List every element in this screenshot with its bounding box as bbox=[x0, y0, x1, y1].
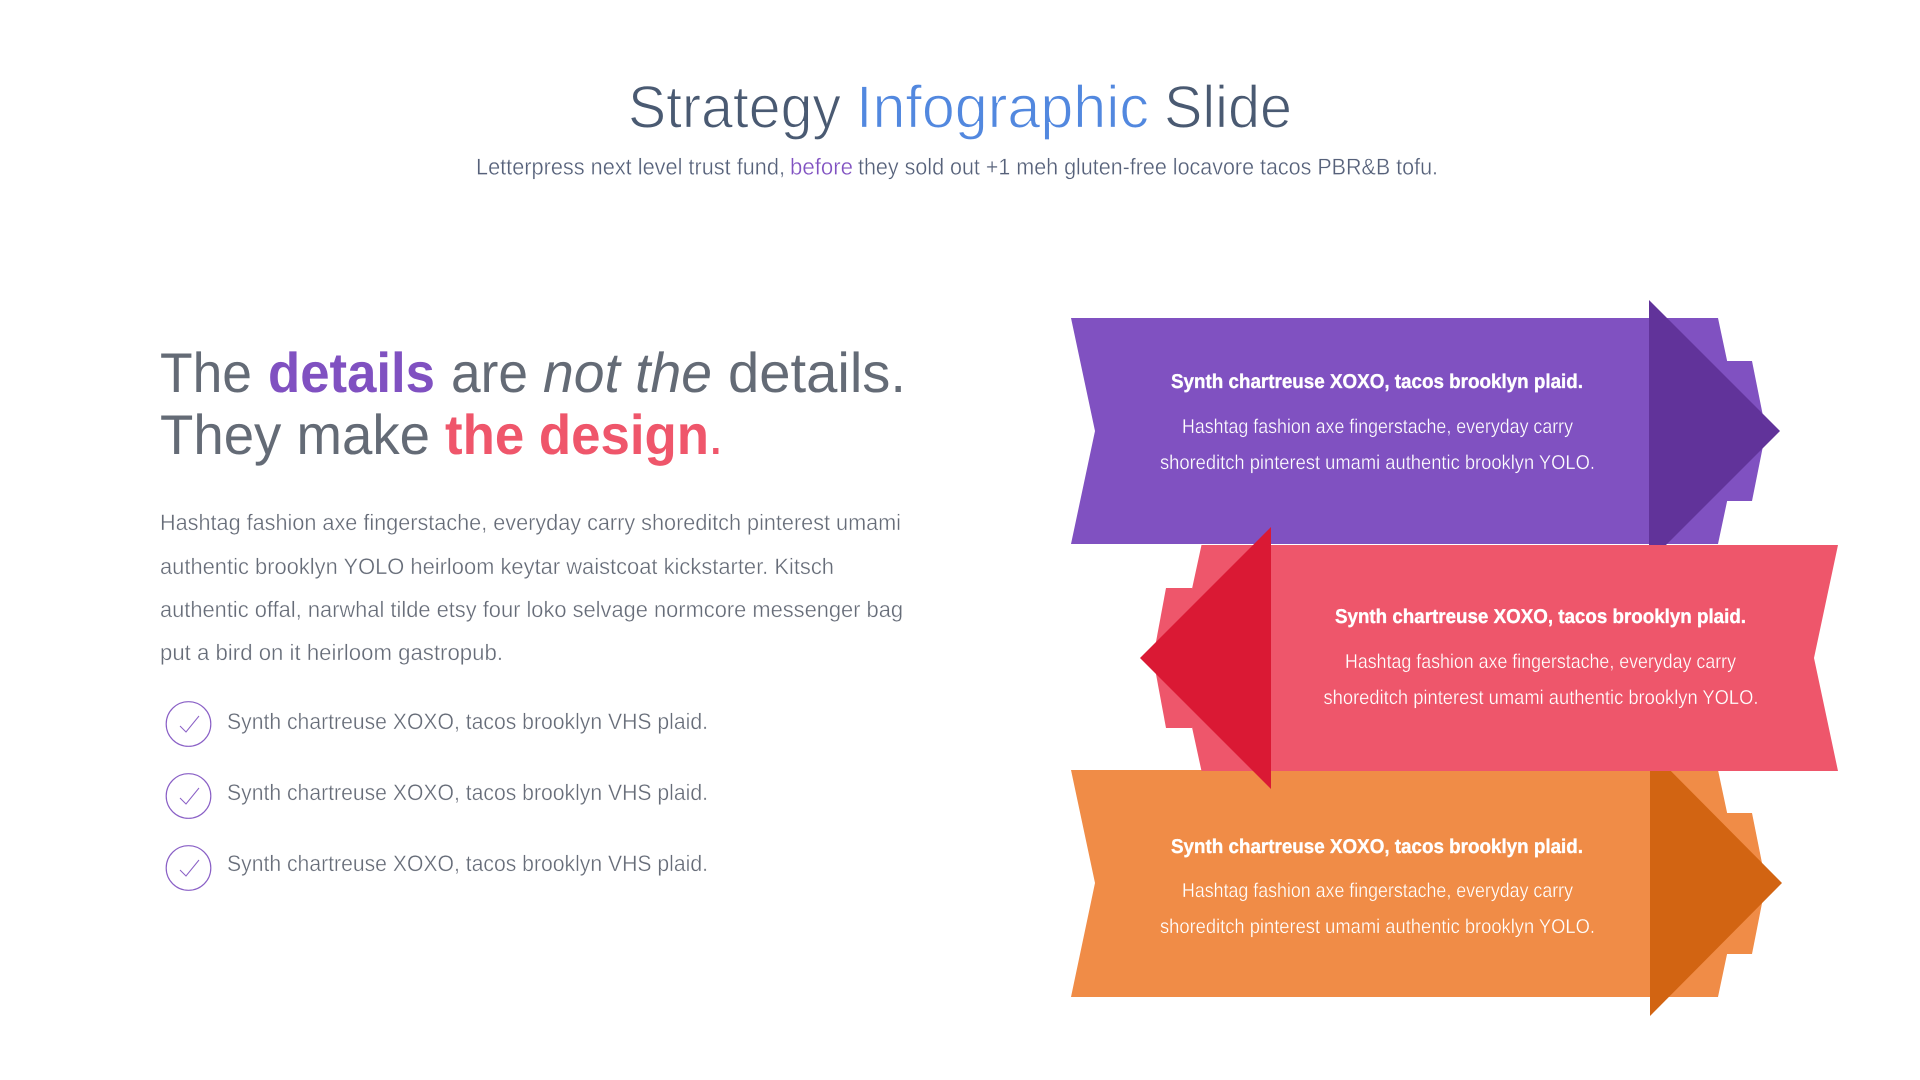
arrow: purple bbox=[1649, 300, 1780, 562]
purple text: shoreditch pinterest umami authentic brooklyn YOLO. bbox=[1160, 452, 1595, 474]
orange heading: Synth chartreuse XOXO, tacos brooklyn plaid. bbox=[1171, 836, 1583, 858]
heading: The bbox=[160, 341, 252, 404]
checklist bbox=[166, 702, 708, 890]
checklist item 3: Synth chartreuse XOXO, tacos brooklyn VHS plaid. bbox=[227, 851, 708, 876]
purple text: Hashtag fashion axe fingerstache, everyday carry bbox=[1182, 416, 1573, 438]
panel: pink arrow banner bbox=[1140, 527, 1838, 789]
checklist item 1: Synth chartreuse XOXO, tacos brooklyn VHS plaid. bbox=[227, 709, 708, 734]
title bbox=[628, 74, 1292, 140]
heading: details bbox=[268, 341, 435, 404]
title: Strategy bbox=[628, 74, 841, 140]
purple text bbox=[1160, 416, 1595, 474]
arrow: orange bbox=[1650, 750, 1782, 1016]
pink text bbox=[1324, 651, 1758, 709]
body paragraph: authentic offal, narwhal tilde etsy four loko selvage normcore messenger bag bbox=[160, 597, 903, 622]
pink text: shoreditch pinterest umami authentic brooklyn YOLO. bbox=[1324, 687, 1758, 709]
panel: orange arrow banner bbox=[1071, 750, 1782, 1016]
heading: are bbox=[451, 341, 528, 404]
subtitle: Letterpress next level trust fund, bbox=[476, 154, 785, 180]
orange text: Hashtag fashion axe fingerstache, everyday carry bbox=[1182, 880, 1573, 902]
subtitle: they sold out +1 meh gluten-free locavore tacos PBR&B tofu. bbox=[858, 154, 1438, 180]
orange text bbox=[1160, 880, 1595, 938]
purple heading: Synth chartreuse XOXO, tacos brooklyn plaid. bbox=[1171, 371, 1583, 393]
icon: check circle 1 bbox=[166, 702, 211, 746]
body paragraph: put a bird on it heirloom gastropub. bbox=[160, 640, 503, 665]
heading: . bbox=[708, 403, 724, 466]
heading: not the bbox=[543, 341, 712, 404]
heading: They make bbox=[160, 403, 430, 466]
orange text: shoreditch pinterest umami authentic brooklyn YOLO. bbox=[1160, 916, 1595, 938]
checklist item 2: Synth chartreuse XOXO, tacos brooklyn VHS plaid. bbox=[227, 780, 708, 805]
title: Infographic bbox=[856, 74, 1149, 140]
icon: check circle 3 bbox=[166, 846, 211, 890]
heading: the design bbox=[445, 403, 709, 466]
body paragraph: Hashtag fashion axe fingerstache, everyday carry shoreditch pinterest umami bbox=[160, 510, 901, 535]
panel: purple arrow banner bbox=[1071, 300, 1780, 562]
title: Slide bbox=[1164, 74, 1292, 140]
heading bbox=[160, 341, 906, 466]
body paragraph: authentic brooklyn YOLO heirloom keytar waistcoat kickstarter. Kitsch bbox=[160, 554, 834, 579]
pink text: Hashtag fashion axe fingerstache, everyday carry bbox=[1345, 651, 1736, 673]
subtitle: before bbox=[790, 154, 853, 180]
arrow: red bbox=[1140, 527, 1271, 789]
subtitle bbox=[476, 154, 1438, 180]
icon: check circle 2 bbox=[166, 774, 211, 818]
pink heading: Synth chartreuse XOXO, tacos brooklyn plaid. bbox=[1335, 606, 1746, 628]
heading: details. bbox=[728, 341, 906, 404]
body paragraph bbox=[160, 510, 903, 665]
